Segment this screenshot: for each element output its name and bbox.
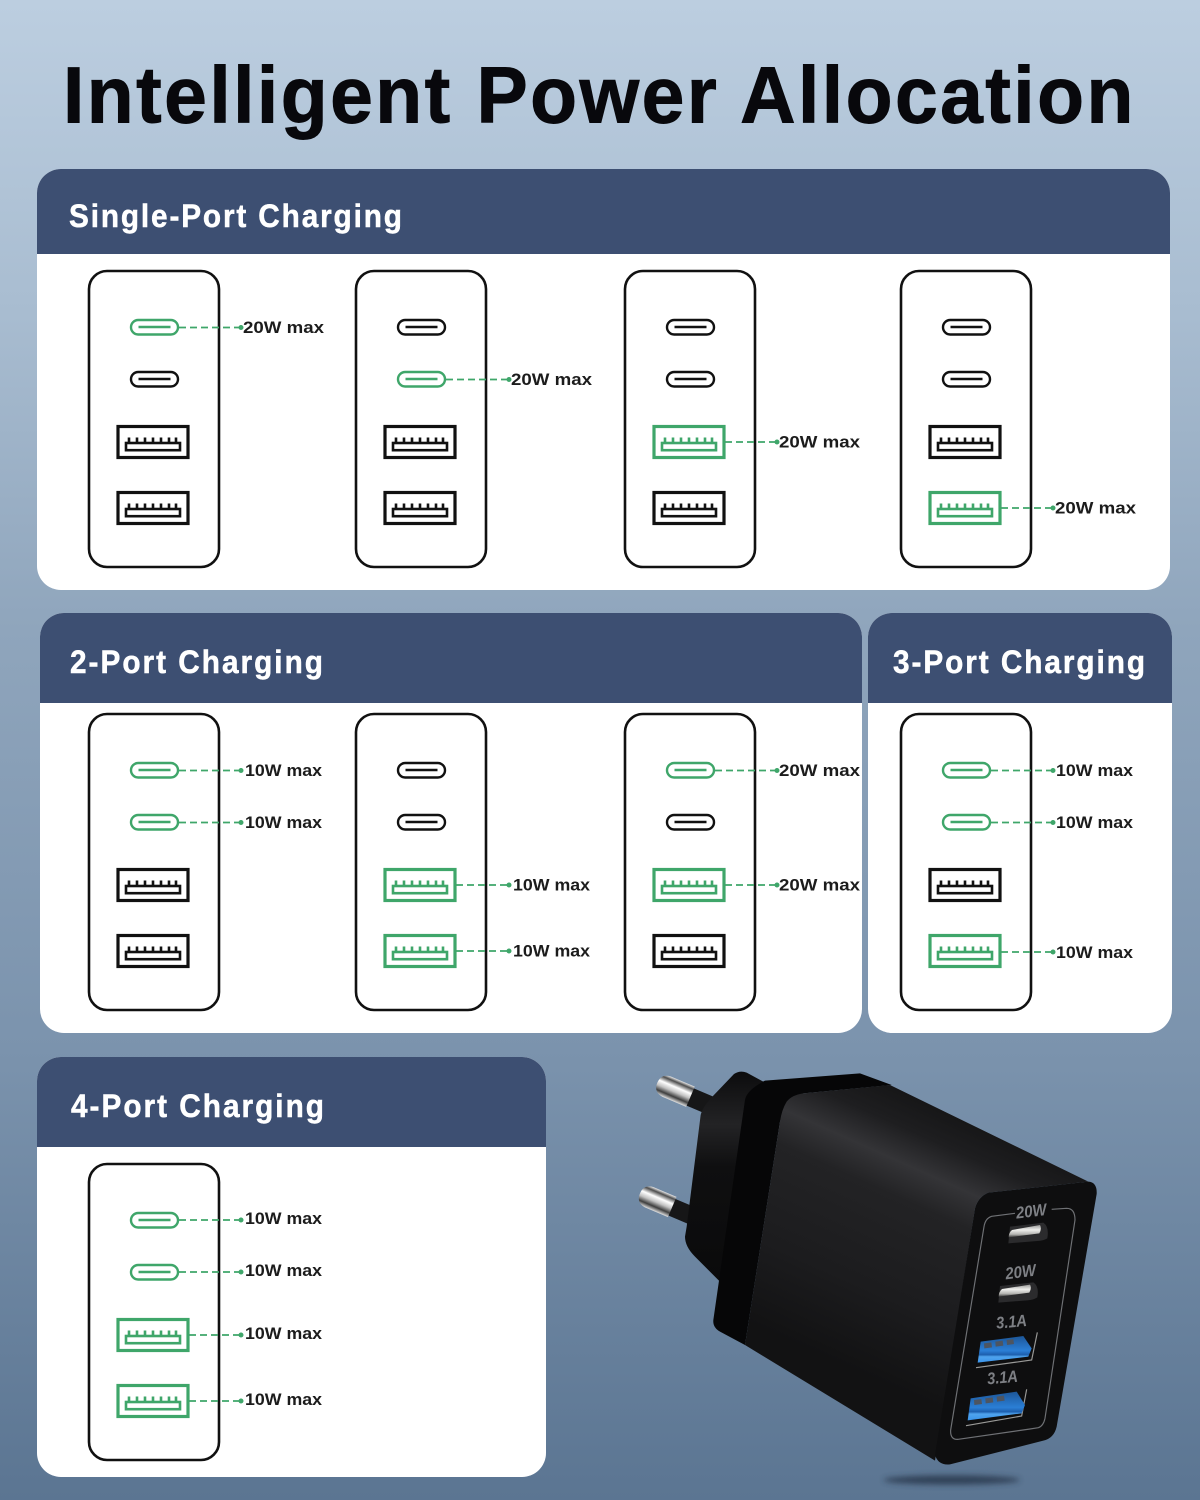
panel header: single-port: Single-Port Charging xyxy=(69,198,402,234)
callout: 20W max: 20W max xyxy=(243,318,325,337)
charger diagram: USB-A 1 active xyxy=(625,271,861,567)
callouts: 10W max: 10W max xyxy=(513,942,591,960)
callouts: 10W max: 10W max xyxy=(1056,761,1134,780)
panel header: 4-port xyxy=(37,1057,546,1147)
panel header: 2-port: 2-Port Charging xyxy=(70,644,323,680)
callouts: 20W max: 20W max xyxy=(779,761,861,780)
charger diagram: USB-A 2 active xyxy=(901,271,1137,567)
USB-C port 1 with label: 20W xyxy=(1014,1200,1049,1223)
callouts: 20W max xyxy=(715,761,861,894)
charger diagram: USB-C plus USB-A active xyxy=(625,714,861,1010)
panel header: 3-port xyxy=(868,613,1172,703)
charger diagram: USB-C 2 active xyxy=(356,271,593,567)
callouts: 10W max: 10W max xyxy=(513,876,591,894)
callouts: 10W max: 10W max xyxy=(245,1261,323,1280)
panel: single-port charging xyxy=(37,169,1170,590)
panel header: single-port xyxy=(37,169,1170,254)
callout: 20W max xyxy=(179,318,325,337)
USB-A port 2 with label xyxy=(966,1367,1027,1426)
callouts: 10W max: 10W max xyxy=(1056,813,1134,832)
USB-C port 2 with label: 20W xyxy=(1003,1261,1038,1283)
callouts: 20W max: 20W max xyxy=(779,876,861,894)
port panel outline xyxy=(951,1208,1075,1439)
plug pin: upper xyxy=(653,1073,721,1118)
charger diagram: both USB-C active xyxy=(89,714,323,1010)
callouts: 10W max: 10W max xyxy=(1056,943,1134,962)
callouts: 10W max xyxy=(179,761,323,832)
product photo: charger xyxy=(636,1072,1097,1485)
charger diagram: four ports active xyxy=(89,1164,323,1460)
callouts: 10W max xyxy=(179,1209,323,1409)
panel header: 2-port xyxy=(40,613,862,703)
title: Intelligent Power Allocation xyxy=(63,50,1133,140)
callout: 20W max: 20W max xyxy=(511,370,593,389)
callouts: 10W max: 10W max xyxy=(245,813,323,832)
USB-A port 2 with label: 3.1A xyxy=(986,1367,1019,1388)
plug base xyxy=(685,1072,763,1283)
callouts: 10W max: 10W max xyxy=(245,761,323,780)
callouts: 10W max: 10W max xyxy=(245,1390,323,1409)
charger diagram: both USB-A active xyxy=(356,714,591,1010)
USB-C port 2 with label xyxy=(998,1261,1038,1303)
plug pin: lower xyxy=(636,1183,700,1227)
USB-A port 1 with label: 3.1A xyxy=(995,1311,1028,1333)
callouts: 10W max: 10W max xyxy=(245,1324,323,1343)
callout: 20W max xyxy=(1001,498,1137,518)
front face xyxy=(935,1182,1097,1464)
charger diagram: three ports active xyxy=(901,714,1134,1010)
callouts: 10W max xyxy=(456,876,591,960)
USB-C port 1 with label xyxy=(1008,1200,1049,1243)
callouts: 10W max xyxy=(991,761,1134,962)
charger diagram: USB-C 1 active xyxy=(89,271,325,567)
callout: 20W max: 20W max xyxy=(1055,498,1137,518)
callout: 20W max xyxy=(446,370,593,389)
callout: 20W max: 20W max xyxy=(779,432,861,452)
main body xyxy=(745,1085,1088,1461)
panel: 2-port charging xyxy=(40,613,862,1033)
callout: 20W max xyxy=(725,432,861,452)
panel: 3-port charging xyxy=(868,613,1172,1033)
USB-A port 1 with label xyxy=(976,1311,1037,1368)
black collar xyxy=(713,1073,892,1345)
callouts: 10W max: 10W max xyxy=(245,1209,323,1228)
panel header: 3-port: 3-Port Charging xyxy=(893,644,1145,680)
panel: 4-port charging xyxy=(37,1057,546,1477)
panel header: 4-port: 4-Port Charging xyxy=(71,1088,324,1124)
